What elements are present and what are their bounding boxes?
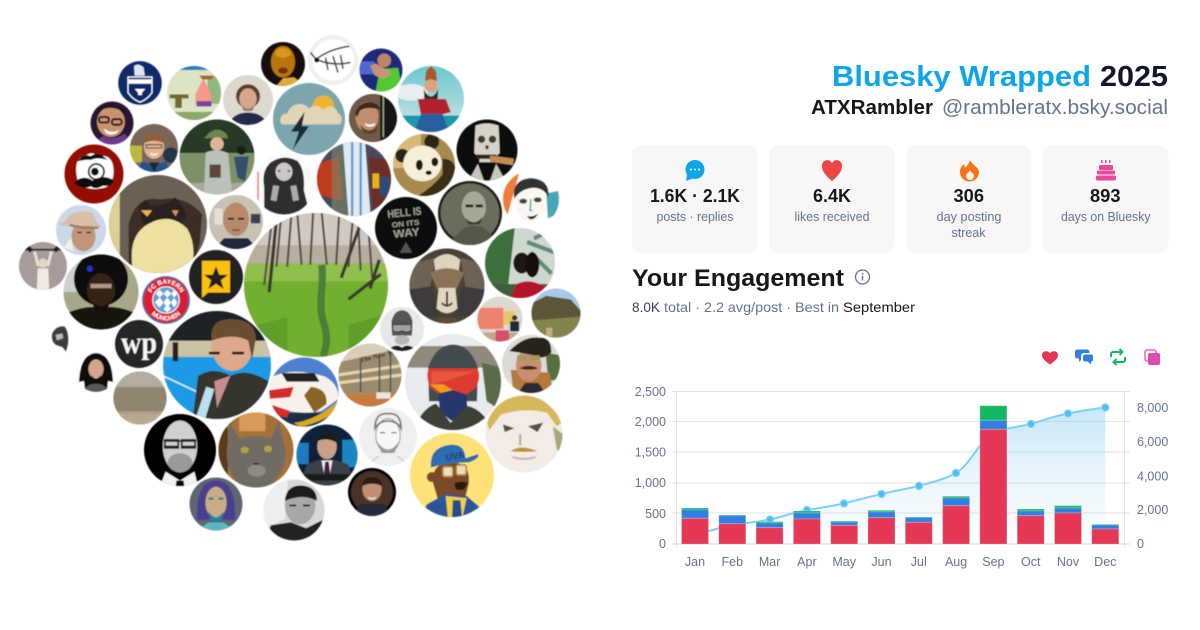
left axis labels xyxy=(635,385,666,551)
engagement summary: September xyxy=(843,299,915,315)
combo chart: monthly engagement xyxy=(635,385,1168,569)
right axis labels: 8,000 xyxy=(1137,401,1168,415)
chart legend icons xyxy=(1042,349,1160,365)
month labels: Aug xyxy=(945,555,967,569)
avatar cluster xyxy=(18,35,582,542)
avatar: skull with cigar xyxy=(456,120,518,180)
avatar: Washington Post wp logo xyxy=(115,320,163,368)
icon: info xyxy=(856,270,870,284)
avatar: man looking up under palms xyxy=(485,228,555,298)
avatar: kittens on hair photo xyxy=(109,175,207,273)
month labels: Sep xyxy=(982,555,1005,569)
engagement summary: total · 2.2 avg/post · Best in xyxy=(664,299,839,315)
avatar: pencil sketch man xyxy=(359,408,417,466)
stat card: likes received: likes received xyxy=(794,210,870,224)
icon: replies bubbles xyxy=(1075,350,1093,364)
left axis labels: 0 xyxy=(659,537,666,551)
month labels: Jan xyxy=(685,555,705,569)
month labels: Feb xyxy=(722,555,743,569)
avatar: cartoon face xyxy=(502,173,560,222)
avatar: Hell Is On Its Way shirt: ON ITS xyxy=(391,218,420,230)
avatar: Lyndon Johnson in hat xyxy=(56,205,106,255)
stat card: likes received xyxy=(769,145,894,253)
avatar: star logo xyxy=(189,250,243,304)
month labels: Mar xyxy=(759,555,780,569)
avatar: Hell Is On Its Way shirt xyxy=(375,197,437,259)
right axis labels xyxy=(1137,401,1168,551)
avatar: green jersey fan xyxy=(360,48,402,92)
left axis labels: 500 xyxy=(645,507,666,521)
avatar: man at basketball arena xyxy=(163,311,271,419)
month labels: Jun xyxy=(871,555,892,569)
avatar: dark background man xyxy=(348,468,396,516)
avatar: masked helmet portrait xyxy=(380,307,424,351)
avatar: UVA cartoon man: UVA xyxy=(445,449,465,463)
avatar: Camus black and white xyxy=(264,480,324,540)
left axis labels: 2,500 xyxy=(635,385,666,399)
stacked bars: likes, replies, reposts xyxy=(682,406,1119,544)
month labels: May xyxy=(832,555,857,569)
left axis labels: 2,000 xyxy=(635,415,666,429)
icon: likes heart xyxy=(1042,351,1058,364)
avatar: navy eagle shield xyxy=(116,59,164,107)
avatar: long-hair cartoon xyxy=(76,352,116,392)
cumulative line xyxy=(695,408,1105,535)
avatar: FC Bayern crest: FC BAYERN xyxy=(147,278,185,294)
right axis labels: 4,000 xyxy=(1137,470,1168,484)
month labels: Jul xyxy=(911,555,927,569)
avatar: afro portrait xyxy=(64,252,138,330)
title: 2025 xyxy=(1100,61,1168,93)
avatar: New York Times building xyxy=(338,342,421,406)
avatar: TV anchor xyxy=(296,424,358,486)
avatar: presenter with slides xyxy=(478,296,522,342)
cumulative line points xyxy=(766,404,1109,523)
avatar: curly-haired man xyxy=(223,75,273,125)
avatar: Patrick cartoon xyxy=(167,66,221,120)
avatar: weather storm icon xyxy=(273,83,345,155)
avatar: abstract painting xyxy=(317,142,391,216)
avatar: ski goggles xyxy=(405,334,501,430)
stat card: posting streak: 306 xyxy=(954,186,984,206)
icon: cake xyxy=(1096,160,1116,180)
user name and handle: ATXRambler xyxy=(811,97,933,119)
stat card: likes received: 6.4K xyxy=(813,186,851,206)
right axis labels: 2,000 xyxy=(1137,503,1168,517)
avatar: smiling bearded man xyxy=(349,94,397,142)
month labels: Dec xyxy=(1094,555,1116,569)
stat card: posts and replies xyxy=(632,145,758,253)
avatar: green hat man outdoors xyxy=(180,120,254,194)
month labels: Oct xyxy=(1021,555,1041,569)
stat card: days on Bluesky: days on Bluesky xyxy=(1061,210,1151,224)
engagement summary: 8.0K xyxy=(632,299,661,315)
avatar: forest path xyxy=(244,213,388,357)
avatar: black and white portrait with glasses xyxy=(144,414,216,486)
avatar: Hell Is On Its Way shirt: HELL IS xyxy=(387,206,422,221)
avatar: New York Times building: The New York Times xyxy=(359,342,421,364)
month labels: Apr xyxy=(797,555,817,569)
engagement summary xyxy=(632,299,915,315)
avatar: fuzzy mustache face xyxy=(486,396,562,472)
avatar: lumberjack king xyxy=(395,66,464,132)
avatar: decorated airplane xyxy=(270,358,338,426)
right axis labels: 6,000 xyxy=(1137,435,1168,449)
stat card: posting streak: streak xyxy=(952,226,986,240)
icon: chat bubble xyxy=(686,160,704,181)
right axis labels: 0 xyxy=(1137,537,1144,551)
user name and handle: @rambleratx.bsky.social xyxy=(942,97,1168,119)
avatar: blue jacket man xyxy=(130,124,178,172)
avatar: FC Bayern crest: MÜNCHEN xyxy=(150,310,181,322)
avatar: FC Bayern crest xyxy=(141,275,191,325)
avatar: cliff landscape xyxy=(532,288,580,338)
left axis labels: 1,500 xyxy=(635,446,666,460)
avatar: panda xyxy=(393,134,456,196)
avatar: black and white hoodie figure xyxy=(256,156,308,216)
month labels: Nov xyxy=(1057,555,1080,569)
avatar: small ink sketch xyxy=(51,326,69,352)
avatar: orange bald face xyxy=(261,42,305,86)
avatar: baby lifting weights xyxy=(19,242,67,290)
cumulative area xyxy=(695,408,1105,544)
avatar: grey cat xyxy=(218,412,294,488)
avatar: glasses smiling man purple xyxy=(90,102,134,144)
avatar: grey old-photo man xyxy=(438,181,502,245)
avatar: aerial sand city xyxy=(114,372,166,424)
user name and handle xyxy=(811,97,1168,119)
avatar: Hell Is On Its Way shirt: WAY xyxy=(393,226,421,241)
avatar: creature mask xyxy=(410,248,484,324)
icon: heart xyxy=(822,160,842,181)
avatar: bald man xyxy=(209,195,263,249)
stat card: posts and replies: 1.6K · 2.1K xyxy=(650,186,740,206)
title: Bluesky Wrapped xyxy=(832,61,1091,93)
stat card: posting streak xyxy=(906,145,1032,253)
heading: Your Engagement: Your Engagement xyxy=(632,265,844,292)
avatar: cowboy hat mustache xyxy=(502,335,560,393)
stat card: days on Bluesky: 893 xyxy=(1090,186,1120,206)
left axis labels: 1,000 xyxy=(635,476,666,490)
icon: repost arrows xyxy=(1111,349,1125,365)
stat card: posting streak: day posting xyxy=(936,210,1002,224)
avatar: Washington Post wp logo: wp xyxy=(121,325,157,360)
month labels xyxy=(685,555,1116,569)
avatar: teal purple portrait xyxy=(190,478,242,530)
icon: flame xyxy=(960,160,979,182)
chart gridlines and axes xyxy=(672,391,1130,548)
avatar: National Bohemian mascot xyxy=(64,144,124,204)
icon: quotes copy xyxy=(1145,350,1160,365)
stat card: posts and replies: posts · replies xyxy=(656,210,734,224)
avatar: UVA cartoon man xyxy=(410,433,494,517)
avatar: shrimp sketch xyxy=(308,35,358,85)
stat card: days on Bluesky xyxy=(1043,145,1168,253)
